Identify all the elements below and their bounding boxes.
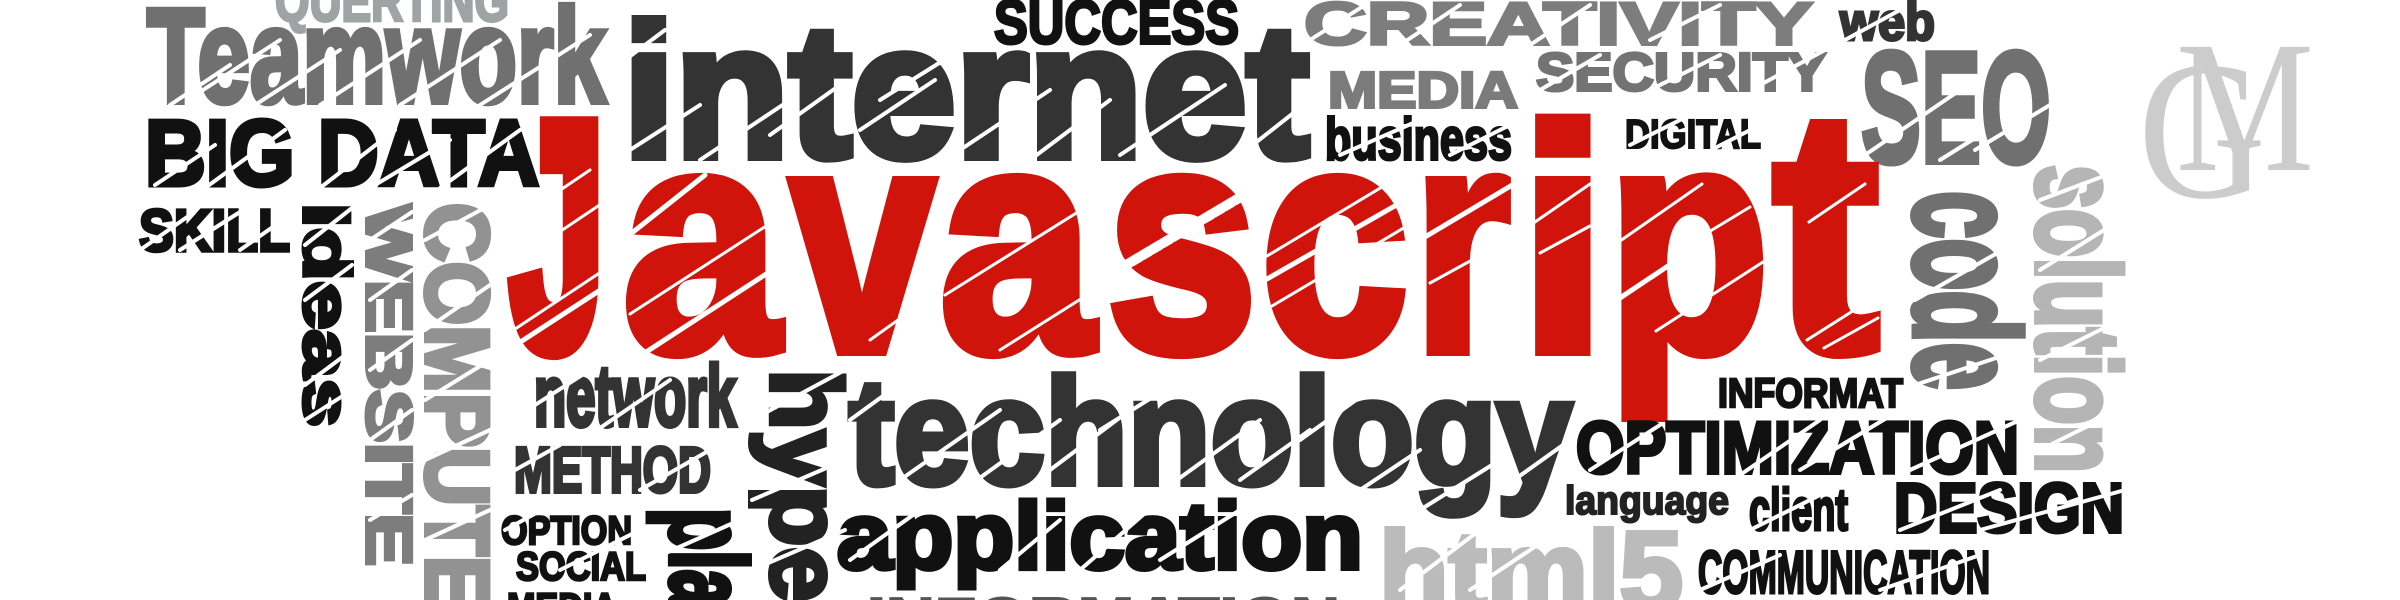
word: application: application — [837, 484, 1363, 590]
word: SKILL: SKILL — [139, 198, 290, 264]
word: SEO: SEO — [1861, 20, 2051, 196]
word: INFORMAT: INFORMAT — [1718, 370, 1903, 416]
logo: GM monogram — [2138, 2, 2314, 240]
word: Javascript (main title): a — [623, 63, 781, 418]
word: Javascript (main title): c — [1261, 63, 1408, 418]
word: Javascript (main title): t — [1773, 39, 1879, 424]
word: Javascript (main title): p — [1608, 63, 1769, 420]
word: code: code — [1883, 191, 2048, 390]
word: network: network — [534, 348, 736, 444]
word: WEBSITE: WEBSITE — [353, 205, 425, 566]
word: METHOD: METHOD — [514, 434, 711, 506]
logo letter G: G — [2138, 21, 2266, 240]
word: MEDIA: MEDIA — [1328, 62, 1518, 118]
word: hype: hype — [750, 369, 862, 600]
word: business: business — [1325, 106, 1512, 172]
word: BIG DATA: BIG DATA — [145, 101, 539, 205]
word: client: client — [1749, 477, 1848, 543]
word: technology: technology — [849, 348, 1572, 516]
word: Javascript (main title): v — [791, 63, 936, 418]
word: SECURITY: SECURITY — [1536, 42, 1826, 102]
word: OPTIMIZATION: OPTIMIZATION — [1576, 408, 2019, 489]
word: OPTION: OPTION — [501, 509, 632, 553]
word: language: language — [1565, 479, 1729, 523]
word: Javascript (main title): r — [1414, 63, 1510, 418]
word: SOCIAL: SOCIAL — [516, 545, 646, 589]
word: DESIGN: DESIGN — [1894, 469, 2124, 547]
word: Javascript (main title): s — [1107, 63, 1257, 418]
word: Javascript (main title) — [511, 39, 1879, 424]
word: Javascript (main title): i — [1519, 63, 1607, 418]
word: DIGITAL: DIGITAL — [1625, 111, 1761, 157]
word: Javascript (main title): a — [940, 63, 1095, 418]
word: Javascript (main title): J — [511, 59, 604, 414]
word: Ideas: Ideas — [290, 203, 364, 427]
logo letter M: M — [2176, 2, 2314, 211]
